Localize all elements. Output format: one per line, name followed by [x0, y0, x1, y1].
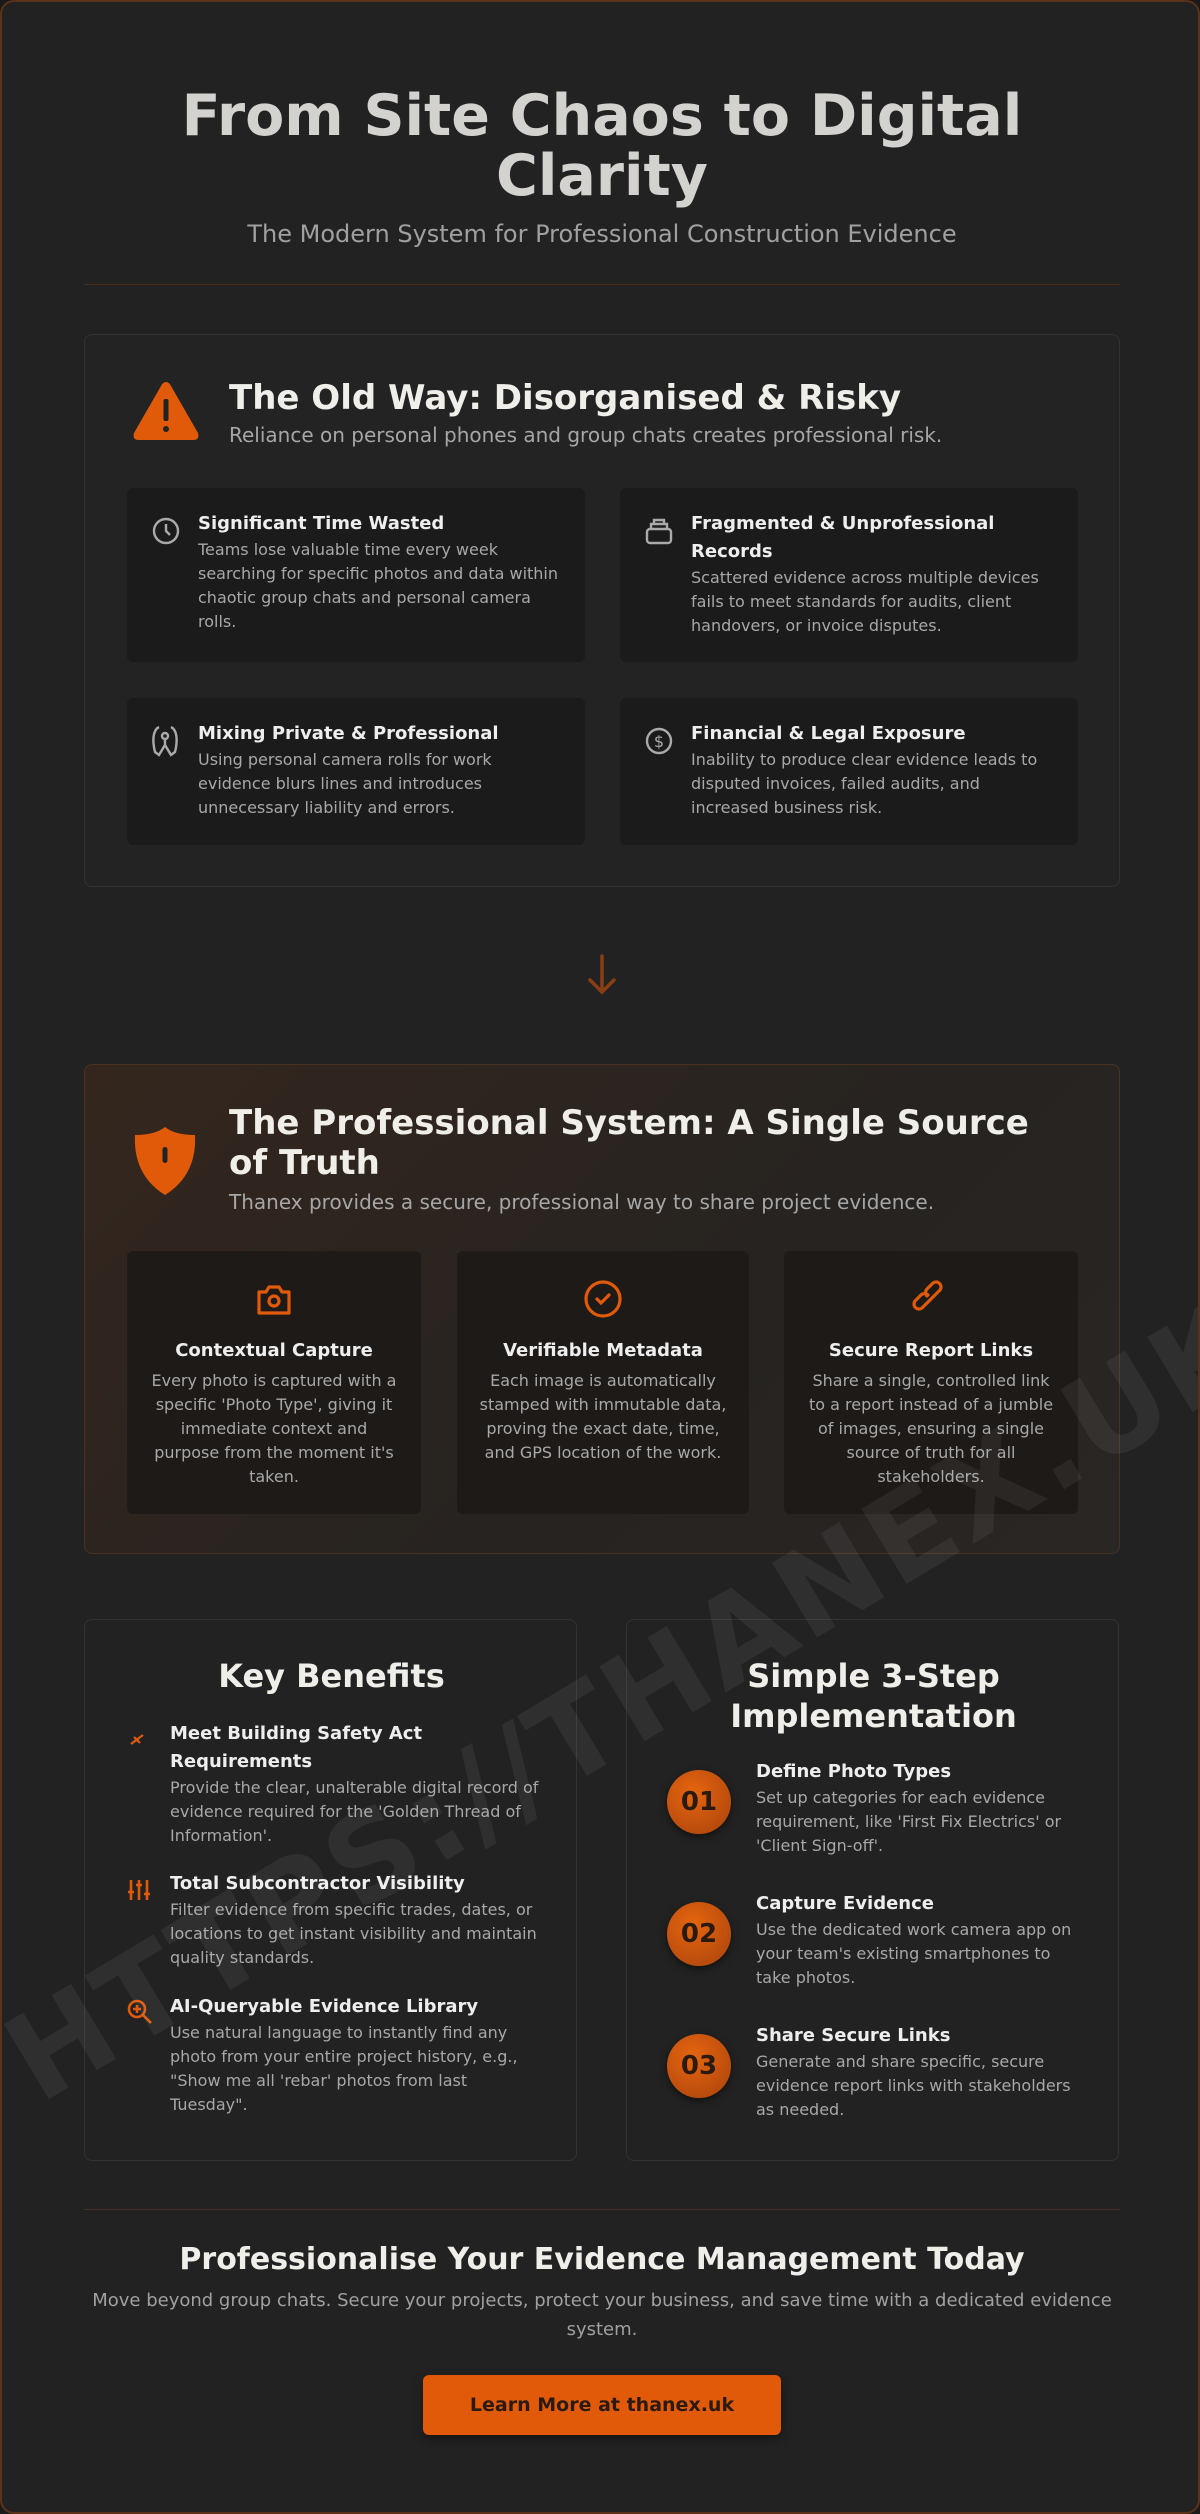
arrow: down [588, 954, 616, 994]
card: time wasted [127, 488, 585, 662]
heading: The Professional System: A Single Source of Truth [229, 1103, 1029, 1183]
step 3 [667, 2025, 1071, 2119]
benefit 3 [128, 1996, 518, 2114]
card: financial: $ [654, 732, 664, 751]
panel: professional system [84, 1064, 1120, 1554]
card: time wasted: Teams lose valuable time every week searching for specific photos and data within chaotic group chats and personal camera rolls. [198, 540, 558, 631]
button [423, 2375, 781, 2435]
subheading: Thanex provides a secure, professional way to share project evidence. [229, 1190, 934, 1214]
heading: Key Benefits [218, 1657, 445, 1695]
benefit 1: Provide the clear, unalterable digital record of evidence required for the 'Golden Thread of Information'. [170, 1778, 538, 1845]
card: mixing: Mixing Private & Professional [198, 723, 499, 744]
card: contextual capture: Every photo is captured with a specific 'Photo Type', giving it immediate context and purpose from the moment it's taken. [152, 1371, 396, 1486]
benefit 2: Total Subcontractor Visibility [170, 1873, 465, 1894]
card: fragmented: Scattered evidence across multiple devices fails to meet standards for audits, client handovers, or invoice disputes. [691, 568, 1039, 635]
step 3: 03 [681, 2051, 717, 2081]
benefit 2: Filter evidence from specific trades, dates, or locations to get instant visibility and maintain quality standards. [170, 1900, 537, 1967]
step 1 [667, 1761, 1062, 1855]
panel: 3-step [626, 1619, 1119, 2161]
card: contextual capture: Contextual Capture [175, 1340, 373, 1361]
step 2: Use the dedicated work camera app on your team's existing smartphones to take photos. [756, 1920, 1071, 1987]
card: contextual capture [127, 1251, 421, 1514]
card: secure links: Secure Report Links [829, 1340, 1033, 1361]
heading: Simple 3-Step Implementation [730, 1657, 1017, 1735]
subheading: Reliance on personal phones and group chats creates professional risk. [229, 423, 942, 447]
card: verifiable metadata: Each image is automatically stamped with immutable data, proving the exact date, time, and GPS location of the work. [480, 1371, 726, 1462]
CTA heading: Professionalise Your Evidence Management Today [179, 2242, 1025, 2277]
step 1: Set up categories for each evidence requirement, like 'First Fix Electrics' or 'Client Sign-off'. [756, 1788, 1061, 1855]
card: financial: Financial & Legal Exposure [691, 723, 966, 744]
button: Learn More at thanex.uk [470, 2394, 734, 2416]
card: mixing: Using personal camera rolls for work evidence blurs lines and introduces unnecessary liability and errors. [198, 750, 492, 817]
benefit 1 [130, 1723, 539, 1845]
CTA text: Move beyond group chats. Secure your projects, protect your business, and save time with a dedicated evidence system. [92, 2290, 1112, 2340]
step 3: Generate and share specific, secure evidence report links with stakeholders as needed. [756, 2052, 1071, 2119]
card: fragmented [620, 488, 1078, 662]
subtitle: The Modern System for Professional Construction Evidence [247, 220, 957, 248]
icon: shield [134, 1127, 196, 1195]
step 1: Define Photo Types [756, 1761, 951, 1782]
step 2: 02 [681, 1919, 717, 1949]
step 3: Share Secure Links [756, 2025, 950, 2046]
card: fragmented: Fragmented & Unprofessional Records [691, 513, 994, 562]
card: verifiable metadata: Verifiable Metadata [503, 1340, 703, 1361]
benefit 1: Meet Building Safety Act Requirements [170, 1723, 422, 1772]
card: secure links [784, 1251, 1078, 1514]
card: time wasted: Significant Time Wasted [198, 513, 444, 534]
benefit 3: AI-Queryable Evidence Library [170, 1996, 478, 2017]
step 2 [667, 1893, 1071, 1987]
card: financial [620, 698, 1078, 845]
heading: The Old Way: Disorganised & Risky [229, 378, 901, 418]
icon: warning triangle [134, 382, 198, 440]
benefit 3: Use natural language to instantly find any photo from your entire project history, e.g., "Show me all 'rebar' photos from last Tuesday". [170, 2023, 518, 2114]
step 2: Capture Evidence [756, 1893, 934, 1914]
panel: key benefits [84, 1619, 577, 2161]
card: mixing [127, 698, 585, 845]
benefit 2 [128, 1873, 537, 1967]
step 1: 01 [681, 1787, 717, 1817]
title: From Site Chaos to Digital Clarity [182, 83, 1022, 209]
card: verifiable metadata [457, 1251, 749, 1514]
card: secure links: Share a single, controlled link to a report instead of a jumble of images, ensuring a single source of truth for all stakeholders. [809, 1371, 1053, 1486]
panel: old way [84, 334, 1120, 887]
card: financial: Inability to produce clear evidence leads to disputed invoices, failed audits, and increased business risk. [691, 750, 1037, 817]
